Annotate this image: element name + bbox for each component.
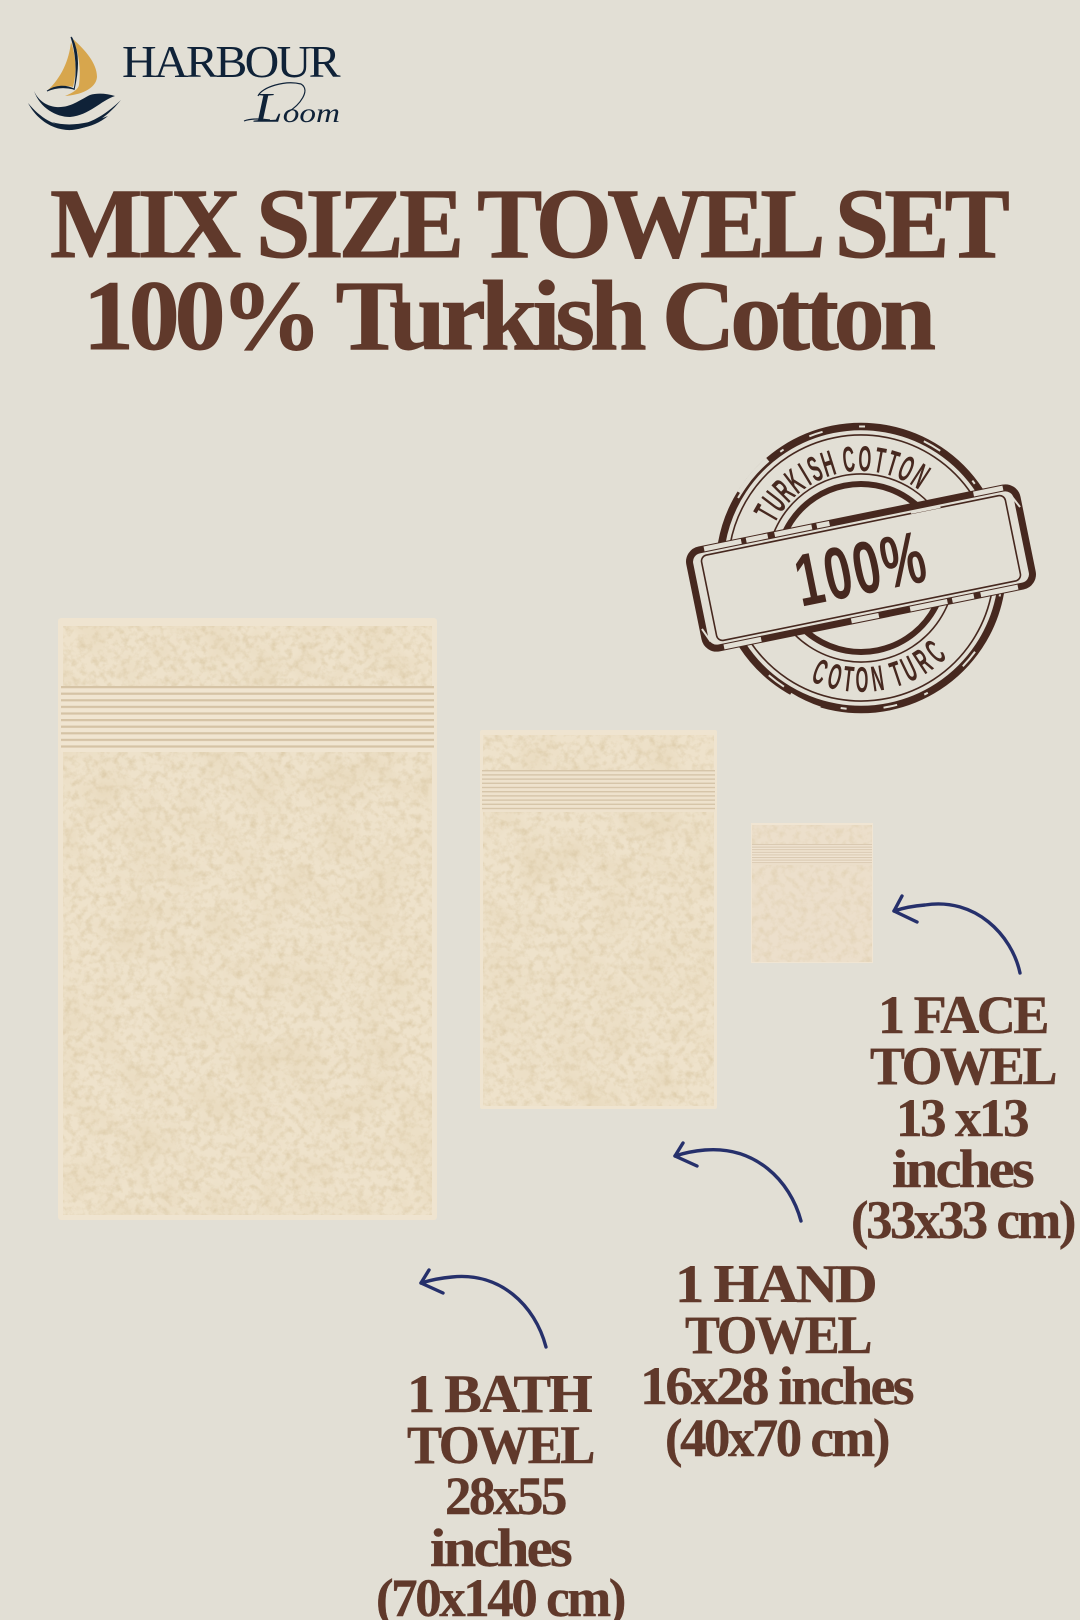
label: face towel: 13 x13 (896, 1088, 1028, 1148)
stamp text: 100%: 100% (788, 515, 935, 623)
logo script: Loom (253, 86, 340, 132)
arrow: to face towel (894, 896, 1020, 973)
label: bath towel (376, 1364, 625, 1620)
stamp text: TURKISH COTTON: U (755, 485, 794, 518)
stamp text: COTON TURC: T (841, 659, 856, 699)
stamp text: TURKISH COTTON: T (882, 443, 904, 484)
stamp text: TURKISH COTTON: N (905, 456, 936, 496)
label: bath towel: inches (430, 1518, 572, 1578)
title line 1: MIX SIZE TOWEL SET (50, 168, 1009, 279)
stamp text: TURKISH COTTON: T (747, 499, 786, 528)
icon: sailboat (28, 37, 121, 130)
stamp text: COTON TURC (801, 626, 957, 712)
stamp text: TURKISH COTTON: H (816, 443, 840, 485)
stamp text: TURKISH COTTON: O (858, 439, 872, 479)
stamp text: COTON TURC: C (807, 651, 833, 693)
arrow: to hand towel (675, 1143, 801, 1221)
stamp text: TURKISH COTTON: K (778, 462, 811, 501)
label: hand towel (640, 1254, 914, 1468)
label: face towel (851, 985, 1074, 1250)
stamp text: COTON TURC: C (917, 633, 953, 671)
stamp text: TURKISH COTTON: T (872, 440, 888, 481)
label: hand towel: 1 HAND (675, 1254, 876, 1314)
stamp text: COTON TURC: T (885, 654, 908, 695)
stamp text: COTON TURC: N (869, 658, 886, 699)
stamp text: TURKISH COTTON: C (840, 439, 857, 480)
stamp text: TURKISH COTTON: O (892, 448, 920, 489)
stamp banner (686, 486, 1036, 650)
label: bath towel: TOWEL (407, 1415, 593, 1475)
stamp text: TURKISH COTTON (737, 423, 943, 534)
label: hand towel: (40x70 cm) (665, 1408, 888, 1468)
label: face towel: inches (892, 1139, 1034, 1199)
stamp: 100% Turkish cotton (668, 396, 1054, 740)
stamp text: COTON TURC: U (895, 648, 923, 689)
label: face towel: 1 FACE (878, 985, 1047, 1045)
label: hand towel: 16x28 inches (640, 1356, 914, 1416)
logo: Harbour Loom (28, 36, 341, 132)
stamp text: COTON TURC: O (855, 660, 869, 700)
label: face towel: TOWEL (870, 1036, 1055, 1096)
stamp text: COTON TURC: O (824, 656, 846, 698)
title line 2: 100% Turkish Cotton (83, 260, 935, 371)
towel: hand (480, 730, 717, 1109)
towel: face (751, 823, 873, 963)
arrow: to bath towel (421, 1270, 546, 1347)
towel: bath (58, 618, 437, 1220)
stamp text: COTON TURC: R (907, 641, 939, 681)
label: face towel: (33x33 cm) (851, 1190, 1074, 1250)
stamp text: TURKISH COTTON: I (793, 456, 817, 493)
stamp text: TURKISH COTTON: S (801, 449, 828, 489)
title (50, 168, 1009, 371)
label: bath towel: 1 BATH (407, 1364, 593, 1424)
label: bath towel: 28x55 (445, 1466, 566, 1526)
label: hand towel: TOWEL (685, 1305, 870, 1365)
stamp text: TURKISH COTTON: R (765, 472, 802, 509)
logo wordmark: HARBOUR (122, 36, 341, 87)
